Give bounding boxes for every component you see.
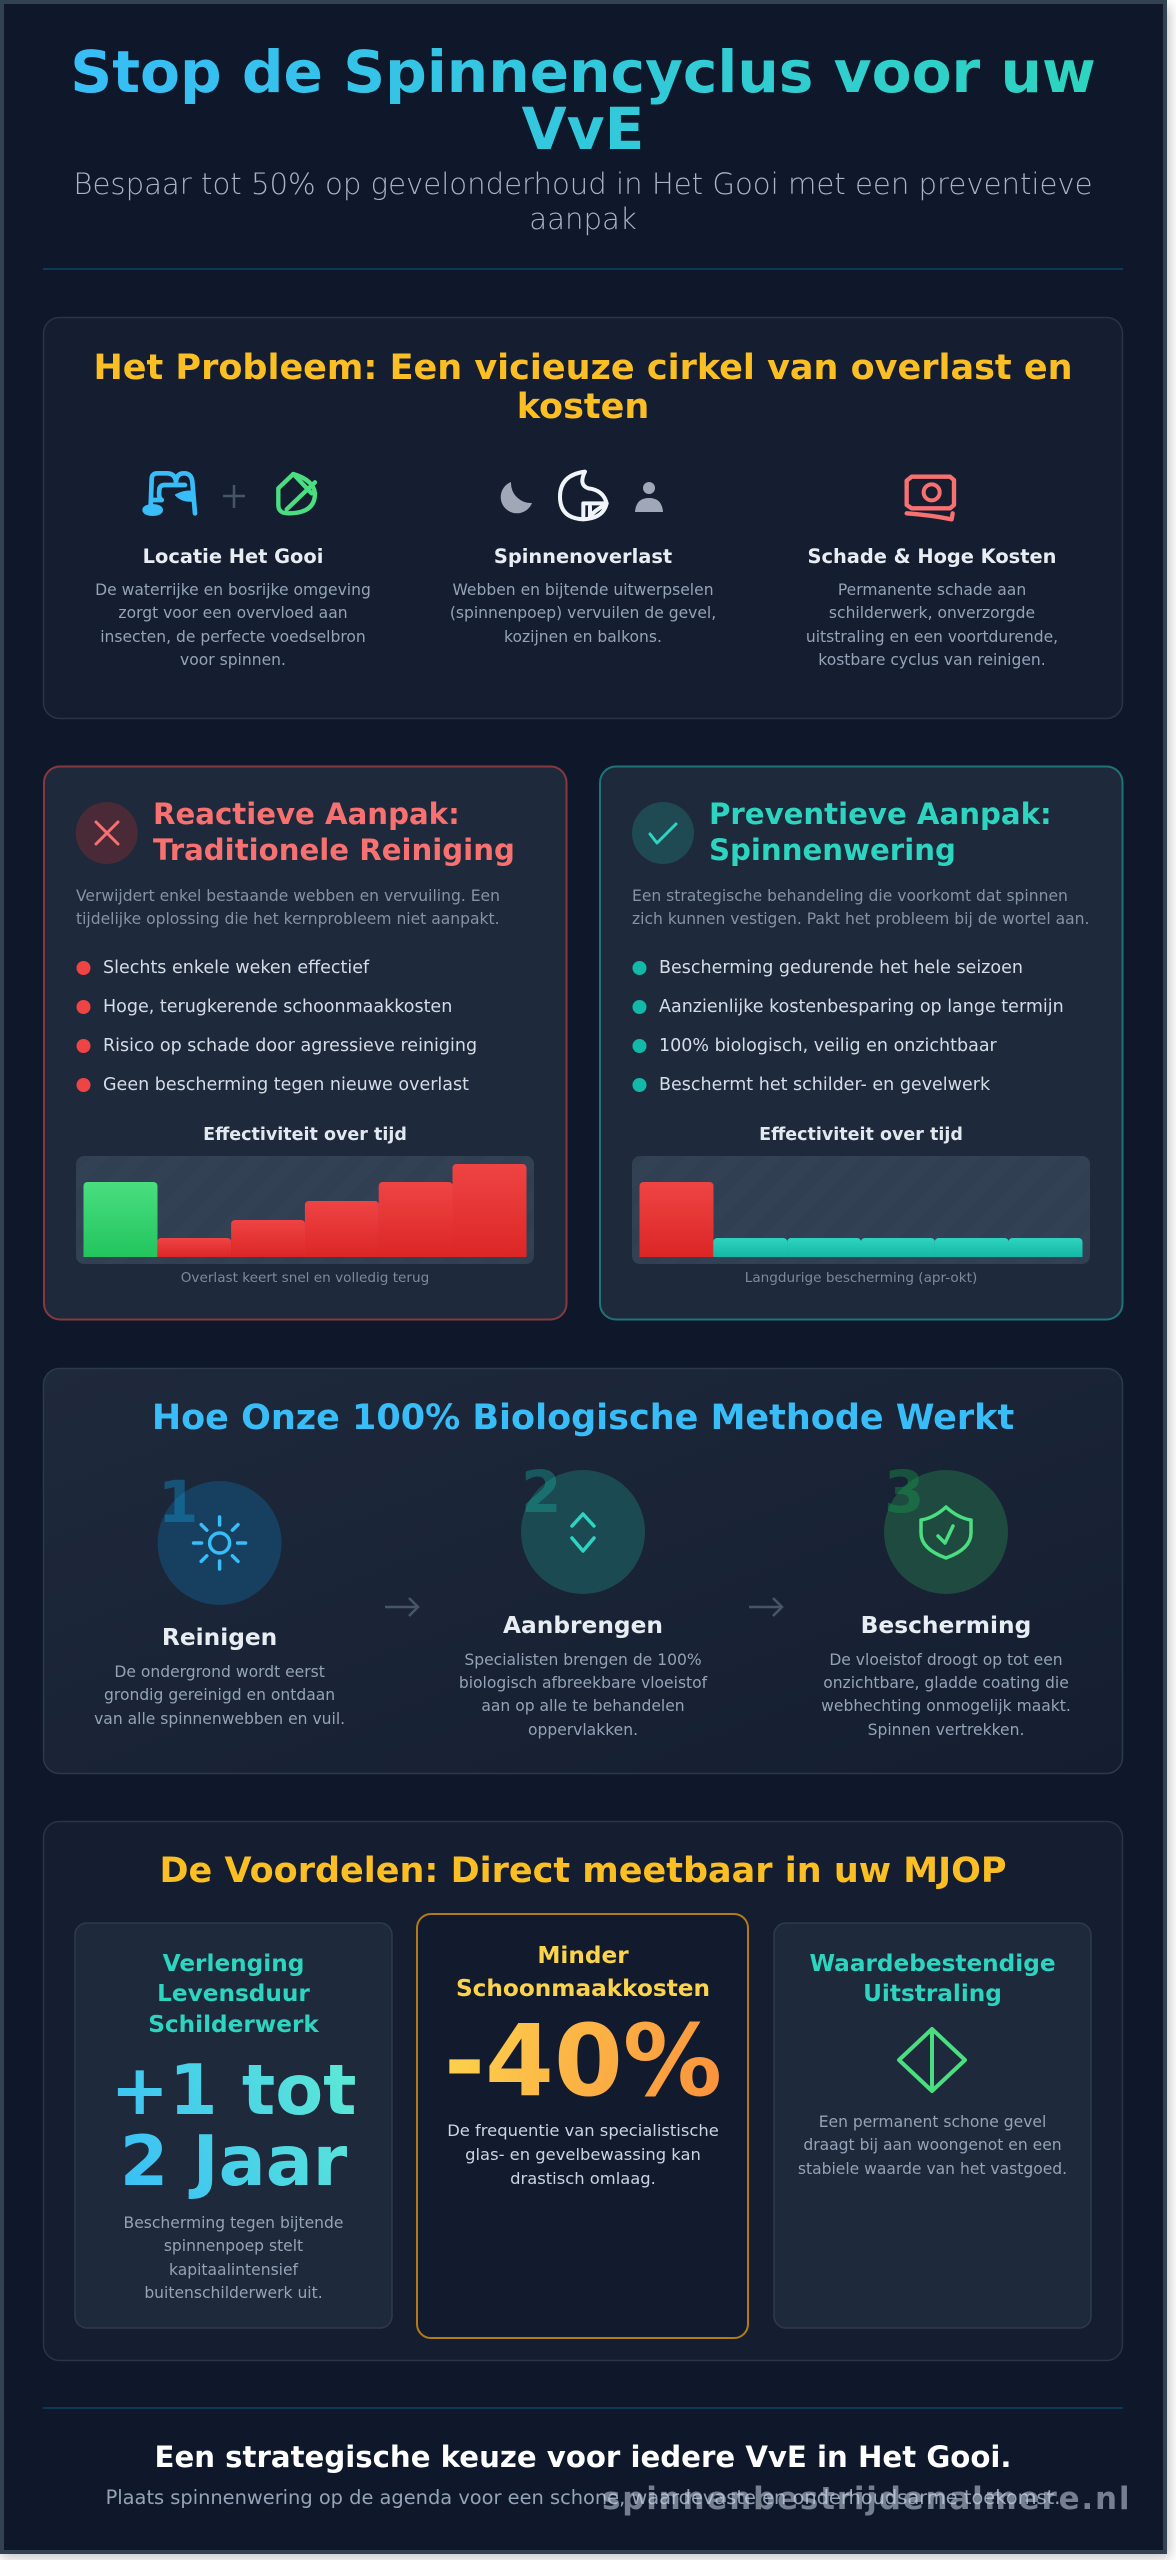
heading: preventief: Spinnenwering [709, 833, 956, 867]
card title: Levensduur [157, 1980, 310, 2007]
step text: onzichtbare, gladde coating die [823, 1674, 1069, 1692]
card title: Uitstraling [863, 1980, 1002, 2007]
text: spinnenoverlast: (spinnenpoep) vervuilen de gevel, [450, 604, 716, 622]
step text: grondig gereinigd en ontdaan [104, 1686, 335, 1704]
card text: kapitaalintensief [169, 2261, 299, 2279]
arrow [749, 1598, 782, 1616]
chart title: Effectiviteit over tijd [759, 1125, 963, 1145]
icon: plus [223, 485, 245, 508]
column: schade [806, 477, 1058, 669]
list: nadelen: Geen bescherming tegen nieuwe overlast [103, 1075, 469, 1095]
text: schade: uitstraling en een voortdurende, [806, 628, 1058, 646]
panel: preventieve aanpak [600, 766, 1122, 1320]
chart caption: Langdurige bescherming (apr-okt) [745, 1270, 977, 1286]
panel: het probleem [44, 318, 1122, 718]
footer [106, 2440, 1131, 2517]
step text: De ondergrond wordt eerst [114, 1663, 325, 1681]
icon: money [907, 477, 954, 519]
list: voordelen: 100% biologisch, veilig en onzichtbaar [659, 1036, 998, 1056]
card text: Bescherming tegen bijtende [124, 2214, 343, 2232]
card text: spinnenpoep stelt [164, 2237, 303, 2255]
step number: 3 [884, 1458, 924, 1526]
footer title: Een strategische keuze voor iedere VvE in Het Gooi. [155, 2440, 1011, 2474]
text: locatie: insecten, de perfecte voedselbron [100, 628, 366, 646]
card: uitstraling [774, 1923, 1091, 2328]
big stat: 2 Jaar [120, 2121, 348, 2202]
list: voordelen: Beschermt het schilder- en gevelwerk [659, 1075, 991, 1095]
icon: cross [76, 802, 138, 864]
card text: stabiele waarde van het vastgoed. [798, 2160, 1067, 2178]
step title: Aanbrengen [503, 1612, 663, 1639]
step number: 1 [158, 1468, 198, 1536]
text: schade: kostbare cyclus van reinigen. [818, 651, 1046, 669]
heading: voordelen: De Voordelen: Direct meetbaar in uw MJOP [159, 1851, 1007, 1891]
icon: person [635, 482, 663, 512]
title: Stop de Spinnencyclus voor uw [70, 38, 1096, 106]
card: levensduur [75, 1923, 392, 2328]
text: locatie: zorgt voor een overvloed aan [118, 604, 348, 622]
subtitle: Bespaar tot 50% op gevelonderhoud in Het Gooi met een preventieve [73, 167, 1093, 201]
step 2 [459, 1458, 708, 1739]
step text: biologisch afbreekbare vloeistof [459, 1674, 708, 1692]
card text: De frequentie van specialistische [447, 2121, 719, 2140]
text: reactief: tijdelijke oplossing die het kernprobleem niet aanpakt. [76, 910, 500, 928]
step text: oppervlakken. [528, 1721, 638, 1739]
header [70, 38, 1096, 236]
big stat: -40% [444, 2004, 722, 2119]
step text: webhechting onmogelijk maakt. [821, 1697, 1071, 1715]
heading: methode: Hoe Onze 100% Biologische Methode Werkt [152, 1398, 1014, 1438]
text: preventief: zich kunnen vestigen. Pakt het probleem bij de wortel aan. [632, 910, 1089, 928]
heading: preventief: Preventieve Aanpak: [709, 797, 1052, 831]
chart title: Effectiviteit over tijd [203, 1125, 407, 1145]
heading: reactief: Traditionele Reiniging [153, 833, 515, 867]
list: nadelen: Risico op schade door agressieve reiniging [103, 1036, 477, 1056]
card text: buitenschilderwerk uit. [144, 2284, 323, 2302]
list: nadelen: Hoge, terugkerende schoonmaakkosten [103, 997, 452, 1017]
text: preventief: Een strategische behandeling die voorkomt dat spinnen [632, 887, 1068, 905]
icon: sun [158, 1481, 282, 1605]
text: locatie: voor spinnen. [180, 651, 286, 669]
icon: water [145, 473, 195, 514]
watermark: spinnenbestrijdenalmere.nl [602, 2481, 1131, 2517]
card title: Schilderwerk [148, 2011, 319, 2038]
card title: Waardebestendige [809, 1950, 1056, 1977]
card title: Verlenging [163, 1950, 304, 1977]
step title: Bescherming [861, 1612, 1031, 1639]
icon: diamond [899, 2029, 965, 2091]
text: spinnenoverlast: Webben en bijtende uitwerpselen [452, 581, 714, 599]
text: schade: Permanente schade aan [838, 581, 1026, 599]
icon: moon [501, 482, 532, 513]
card text: Een permanent schone gevel [819, 2113, 1046, 2131]
step title: Reinigen [162, 1624, 277, 1651]
label: spinnenoverlast: Spinnenoverlast [494, 545, 672, 568]
heading: probleem: Het Probleem: Een vicieuze cirkel van overlast en [93, 348, 1073, 388]
card text: draagt bij aan woongenot en een [803, 2136, 1062, 2154]
arrow [385, 1598, 418, 1616]
list: nadelen: Slechts enkele weken effectief [103, 958, 370, 978]
list: voordelen: Aanzienlijke kostenbesparing op lange termijn [659, 997, 1064, 1017]
card title: Minder [537, 1942, 629, 1969]
title: VvE [522, 95, 644, 163]
text: spinnenoverlast: kozijnen en balkons. [504, 628, 662, 646]
icon: shield [884, 1470, 1008, 1594]
step text: Spinnen vertrekken. [868, 1721, 1024, 1739]
chart caption: Overlast keert snel en volledig terug [181, 1270, 429, 1286]
text: schade: schilderwerk, onverzorgde [829, 604, 1035, 622]
step number: 2 [521, 1458, 561, 1526]
card: schoonmaakkosten [417, 1914, 748, 2338]
icon: spider web [560, 472, 607, 519]
step text: De vloeistof droogt op tot een [829, 1651, 1063, 1669]
card text: glas- en gevelbewassing kan [465, 2145, 701, 2164]
list: voordelen [632, 958, 1064, 1095]
heading: probleem: kosten [517, 387, 649, 427]
panel: voordelen [44, 1822, 1122, 2360]
step 3 [821, 1458, 1071, 1739]
step text: van alle spinnenwebben en vuil. [94, 1710, 345, 1728]
panel: methode [44, 1368, 1122, 1774]
footer text: Plaats spinnenwering op de agenda voor een schone, waardevaste en onderhoudsarme toekomst. [106, 2486, 1060, 2509]
label: locatie: Locatie Het Gooi [143, 545, 323, 568]
icon: check [632, 802, 694, 864]
panel: reactieve aanpak [44, 766, 566, 1320]
bar chart: reactief [76, 1156, 534, 1264]
text: reactief: Verwijdert enkel bestaande webben en vervuiling. Een [76, 887, 500, 905]
subtitle: aanpak [529, 202, 637, 236]
list: voordelen: Bescherming gedurende het hele seizoen [659, 958, 1023, 978]
label: schade: Schade & Hoge Kosten [808, 545, 1056, 568]
big stat: +1 tot [110, 2050, 357, 2131]
icon: leaf [278, 474, 315, 513]
step text: aan op alle te behandelen [481, 1697, 685, 1715]
heading: reactief: Reactieve Aanpak: [153, 797, 460, 831]
card text: drastisch omlaag. [510, 2169, 656, 2188]
column: spinnenoverlast [450, 472, 716, 646]
bar chart: preventief [632, 1156, 1090, 1264]
step text: Specialisten brengen de 100% [464, 1651, 702, 1669]
card title: Schoonmaakkosten [456, 1975, 710, 2002]
icon: chevrons [521, 1470, 645, 1594]
step 1 [94, 1468, 345, 1728]
column: locatie [95, 473, 371, 669]
text: locatie: De waterrijke en bosrijke omgeving [95, 581, 371, 599]
list: nadelen [76, 958, 477, 1095]
